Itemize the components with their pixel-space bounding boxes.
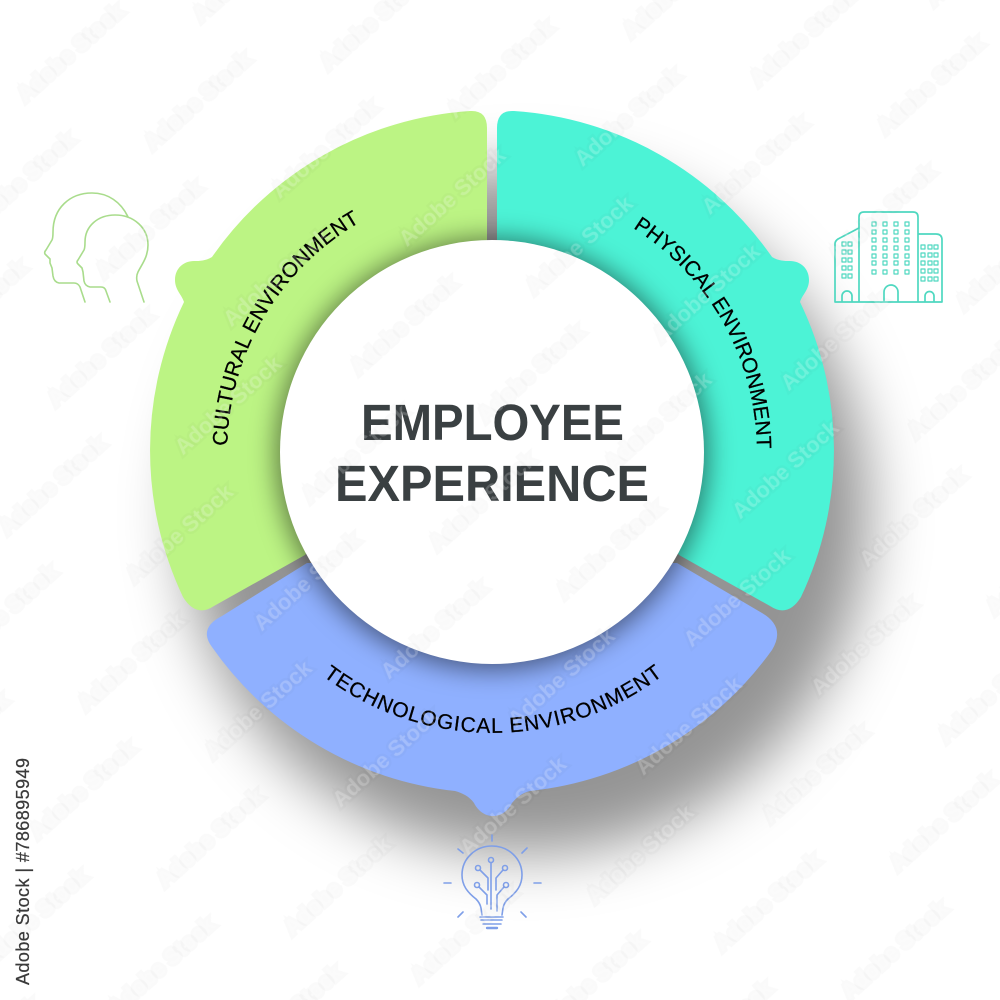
panel: physical environment segment xyxy=(497,111,834,610)
icon: office buildings xyxy=(835,212,942,302)
stock id text: Adobe Stock | #786895949 xyxy=(13,758,33,985)
label: cultural environment: CULTURAL ENVIRONMENT xyxy=(212,210,356,445)
title xyxy=(335,394,649,512)
center circle shadow xyxy=(276,238,708,670)
panel: cultural environment segment xyxy=(150,111,487,610)
icon: light bulb with circuit xyxy=(444,835,541,928)
icon: two heads xyxy=(45,193,148,302)
title: EMPLOYEE xyxy=(361,394,624,451)
label: physical environment: PHYSICAL ENVIRONMENT xyxy=(634,216,772,448)
ring drop shadow xyxy=(184,170,868,854)
label: technological environment: TECHNOLOGICAL ENVIRONMENT xyxy=(327,664,659,734)
center circle xyxy=(280,240,704,664)
title: EXPERIENCE xyxy=(335,455,649,512)
panel: technological environment segment xyxy=(207,563,777,816)
